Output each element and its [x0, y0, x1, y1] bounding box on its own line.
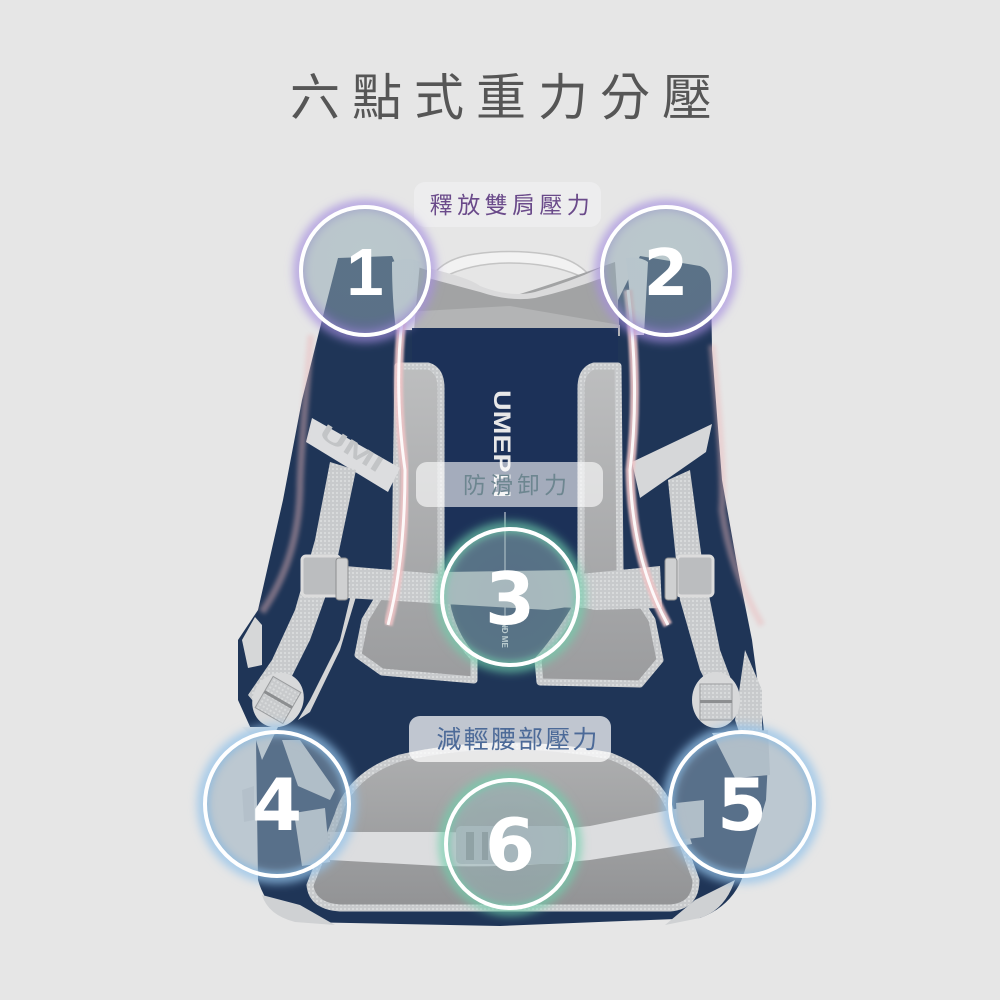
- lower buckle right: [692, 672, 740, 728]
- chest buckle right: [665, 556, 713, 600]
- marker 1: 1: [346, 235, 384, 310]
- label: reduce waist pressure: [409, 716, 611, 762]
- back panel: [412, 328, 618, 578]
- label: release shoulder pressure: 釋放雙肩壓力: [430, 192, 594, 218]
- label: reduce waist pressure: 減輕腰部壓力: [436, 726, 600, 754]
- left reflective band: UMI: [315, 419, 388, 477]
- lumbar pad: [310, 746, 696, 908]
- right reflective band: [632, 424, 712, 498]
- left reflective band: [306, 418, 400, 492]
- title: 六點式重力分壓: [290, 70, 724, 126]
- marker 6: [444, 778, 576, 910]
- marker 6: 6: [485, 803, 535, 887]
- left back pad: [358, 366, 474, 680]
- label: anti-slip: 防滑卸力: [463, 472, 571, 498]
- backpack body: [238, 256, 768, 926]
- shoulder pressure lines: left: [262, 320, 405, 625]
- chest centre buckle: [445, 570, 580, 610]
- shoulder pad tops: [392, 258, 648, 335]
- label: anti-slip: [416, 462, 603, 507]
- label: release shoulder pressure: [414, 182, 601, 227]
- top yoke: [405, 262, 620, 336]
- marker 3: 3: [485, 557, 535, 641]
- marker 1: [299, 205, 431, 337]
- backpack illustration: [238, 252, 770, 926]
- right back pad: [538, 366, 660, 684]
- left webbing strap: [248, 462, 356, 712]
- shoulder pressure lines: right: [628, 290, 762, 625]
- side pocket right: [735, 650, 762, 770]
- centre line and tagline: ND ME: [500, 622, 509, 648]
- marker 5: [668, 730, 816, 878]
- marker 4: 4: [252, 763, 302, 847]
- marker 5: 5: [717, 763, 767, 847]
- chest buckle left: [302, 556, 348, 600]
- left wing strap: [282, 740, 335, 800]
- marker 2: 2: [644, 237, 688, 311]
- right wing strap: [712, 730, 770, 778]
- marker 4: [203, 730, 351, 878]
- carry handle: [432, 252, 590, 278]
- lower curved strap left: [298, 590, 358, 720]
- hip belt: [330, 808, 692, 866]
- centre line and tagline: [500, 512, 509, 648]
- lower buckle left: [242, 663, 314, 737]
- bottom corners: [262, 880, 735, 925]
- marker 3: [440, 527, 580, 667]
- chest strap: [345, 566, 662, 610]
- side pocket left: [242, 617, 262, 668]
- hip buckle: [456, 826, 568, 864]
- right webbing strap: [668, 470, 735, 700]
- brand logo: UMEPLI: [488, 390, 515, 498]
- marker 2: [600, 205, 732, 337]
